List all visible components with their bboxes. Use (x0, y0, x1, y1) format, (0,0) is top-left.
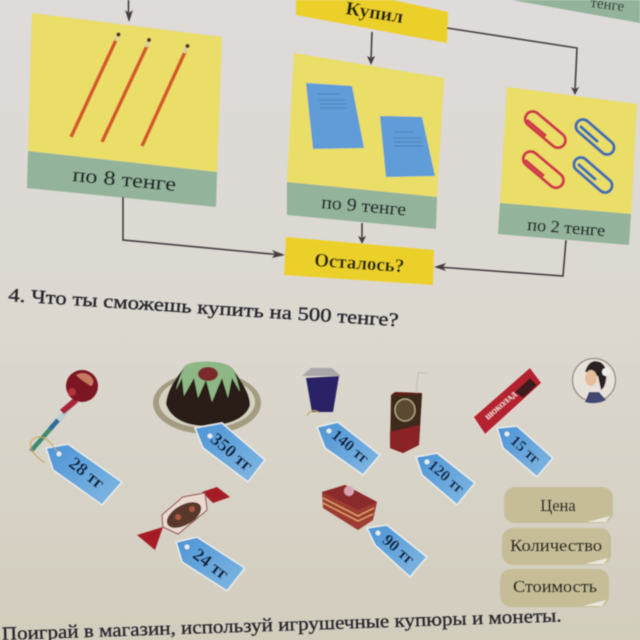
price tag: 15 tg (497, 426, 553, 477)
button: price (504, 487, 613, 523)
item: chocolate bar (473, 367, 542, 435)
box: bought (296, 0, 448, 43)
price tag: 28 tg (31, 437, 122, 505)
arrow: bought to paper clips (447, 28, 579, 95)
item: yogurt cup (302, 368, 341, 416)
price label: 8 tenge: по 8 тенге (72, 164, 177, 196)
box: remainder: Осталось? (314, 250, 405, 277)
price tag: 140 tg: 140 тг (328, 427, 372, 468)
item: candy (137, 487, 230, 550)
button: quantity: Количество (510, 536, 602, 555)
item: juice box (390, 373, 428, 453)
arrow: notebooks to remainder (358, 223, 366, 244)
button: cost (500, 569, 609, 607)
arrow: pencils to remainder (123, 197, 285, 258)
arrow: paper clips to remainder (434, 240, 566, 276)
price tag: 350 tg (195, 423, 265, 482)
price tag: 90 tg (367, 525, 427, 577)
panel: notebooks card (287, 53, 444, 229)
panel: top right cropped price card (512, 0, 640, 23)
icon: pencils (71, 32, 190, 146)
price tag: 24 tg: 24 тг (189, 544, 233, 584)
panel: paper clips card (498, 87, 637, 245)
price tag: 28 tg: 28 тг (65, 453, 109, 493)
icon: notebook right (380, 116, 435, 177)
box: remainder (284, 237, 434, 285)
price tag: 90 tg: 90 тг (379, 530, 419, 569)
item: bundt cake on plate (153, 362, 261, 434)
heading: task 4: 4. Что ты сможешь купить на 500 тенге? (8, 285, 399, 331)
price label: 9 tenge: по 9 тенге (321, 192, 407, 219)
arrow: bought to notebooks (367, 32, 375, 65)
icon: girl helper (572, 358, 616, 403)
panel: pencils card (27, 13, 222, 207)
price tag: 350 tg: 350 тг (207, 429, 257, 475)
item: chocolate bar: ШОКОЛАД (484, 390, 518, 422)
arrow: into pencils card (125, 0, 133, 22)
price tag: 140 tg (317, 422, 380, 475)
icon: notebook left (306, 83, 364, 149)
icon: paper clips (520, 108, 617, 195)
price label: 2 tenge: по 2 тенге (527, 215, 606, 240)
item: lollipop (31, 370, 98, 451)
price tag: 24 tg (176, 537, 245, 591)
item: cake slice (322, 485, 377, 530)
button: price: Цена (540, 496, 576, 515)
button: cost: Стоимость (513, 577, 598, 596)
price tag: 120 tg: 120 тг (425, 457, 467, 497)
button: quantity (502, 528, 611, 565)
price tag: 15 tg: 15 тг (507, 432, 543, 468)
price tag: 120 tg (416, 453, 475, 505)
